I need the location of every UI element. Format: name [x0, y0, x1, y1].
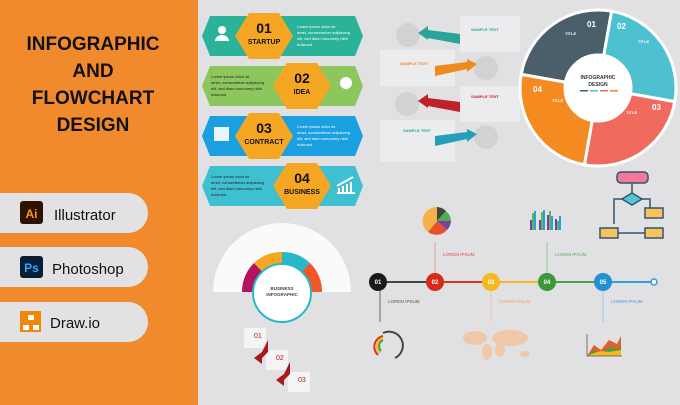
step 02 idea: 02: [294, 70, 310, 86]
chart: timeline: LOREM IPSUM: [611, 299, 643, 304]
step 01 startup: [202, 13, 363, 59]
pill: Photoshop: [0, 247, 148, 287]
step 04 business: euismod: [211, 192, 226, 197]
chart: circular infographic: TITLE: [565, 31, 576, 36]
step 01 startup: 01: [256, 20, 272, 36]
step 02 idea: euismod: [211, 92, 226, 97]
chart: timeline: 04: [544, 280, 551, 286]
step 03 contract: 03: [256, 120, 272, 136]
step 04 business: BUSINESS: [284, 189, 320, 196]
chart: circular infographic: 03: [652, 103, 661, 112]
step 02 idea: amet, consectetuer adipiscing: [211, 80, 264, 85]
chart: circular infographic: TITLE: [552, 98, 563, 103]
chart: timeline: 03: [488, 280, 495, 286]
step 03 contract: amet, consectetuer adipiscing: [297, 130, 350, 135]
step 02 idea: IDEA: [294, 89, 310, 96]
chart: circular infographic: 02: [617, 22, 626, 31]
pill: Photoshop: Photoshop: [52, 261, 124, 278]
step 04 business: [202, 163, 363, 209]
step 03 contract: [202, 113, 363, 159]
chart: timeline: LOREM IPSUM: [555, 252, 587, 257]
step 04 business: 04: [294, 170, 310, 186]
panel: business semicircle: [213, 223, 351, 322]
chart: flowchart icon: [600, 172, 663, 238]
chart: bar icon: [530, 210, 561, 230]
chart: timeline: [369, 242, 657, 322]
chart: circular infographic: TITLE: [638, 39, 649, 44]
panel: 3 steps red arrows: 01: [254, 333, 262, 340]
step 03 contract: euismod: [297, 142, 312, 147]
title: INFOGRAPHIC: [26, 34, 160, 55]
panel: arrow cards: [380, 16, 520, 162]
panel: arrow cards: SAMPLE TEXT: [471, 27, 500, 32]
step 02 idea: Lorem ipsum dolor sit: [211, 74, 250, 79]
chart: timeline: LOREM IPSUM: [388, 299, 420, 304]
panel: 3 steps red arrows: [244, 328, 310, 392]
chart: circular infographic: 01: [587, 20, 596, 29]
panel: arrow cards: SAMPLE TEXT: [400, 61, 429, 66]
pill: Illustrator: Ai: [26, 207, 38, 221]
step 01 startup: Lorem ipsum dolor sit: [297, 24, 336, 29]
icon: area chart: [587, 334, 622, 356]
step 04 business: Lorem ipsum dolor sit: [211, 174, 250, 179]
chart: circular infographic: DESIGN: [588, 82, 608, 88]
panel: business semicircle: INFOGRAPHIC: [266, 292, 299, 297]
panel: business semicircle: BUSINESS: [270, 286, 294, 291]
pill: Draw.io: [0, 302, 148, 342]
chart: timeline: 02: [432, 280, 439, 286]
icon: world map: [463, 330, 530, 360]
chart: circular infographic: INFOGRAPHIC: [580, 75, 616, 81]
chart: pie icon: [423, 207, 451, 235]
pill: Illustrator: [0, 193, 148, 233]
panel: arrow cards: SAMPLE TEXT: [471, 94, 500, 99]
chart: circular infographic: TITLE: [626, 110, 637, 115]
step 03 contract: Lorem ipsum dolor sit: [297, 124, 336, 129]
panel: arrow cards: SAMPLE TEXT: [403, 128, 432, 133]
panel: orange sidebar: [0, 0, 198, 405]
step 04 business: amet, consectetuer adipiscing: [211, 180, 264, 185]
pill: Draw.io: Draw.io: [50, 315, 100, 332]
step 02 idea: [202, 63, 363, 109]
step 01 startup: elit, sed diam nonummy nibh: [297, 36, 348, 41]
pill: Illustrator: Illustrator: [54, 207, 116, 224]
chart: circular infographic: [520, 10, 676, 166]
step 03 contract: elit, sed diam nonummy nibh: [297, 136, 348, 141]
panel: 3 steps red arrows: 03: [298, 377, 306, 384]
panel: 3 steps red arrows: 02: [276, 355, 284, 362]
step 01 startup: euismod: [297, 42, 312, 47]
chart: timeline: LOREM IPSUM: [499, 299, 531, 304]
panel: hexagon steps: [202, 13, 363, 209]
chart: timeline: LOREM IPSUM: [443, 252, 475, 257]
step 04 business: elit, sed diam nonummy nibh: [211, 186, 262, 191]
title: FLOWCHART: [32, 88, 155, 109]
step 01 startup: amet, consectetuer adipiscing: [297, 30, 350, 35]
chart: timeline: 01: [375, 280, 382, 286]
pill: Photoshop: Ps: [24, 261, 39, 275]
title: [26, 34, 160, 136]
step 02 idea: elit, sed diam nonummy nibh: [211, 86, 262, 91]
title: AND: [72, 61, 114, 82]
title: DESIGN: [57, 115, 129, 136]
step 01 startup: STARTUP: [248, 39, 281, 46]
chart: timeline: 05: [600, 280, 607, 286]
icon: rainbow ring: [374, 332, 403, 358]
chart: circular infographic: 04: [533, 85, 542, 94]
step 03 contract: CONTRACT: [244, 139, 284, 146]
